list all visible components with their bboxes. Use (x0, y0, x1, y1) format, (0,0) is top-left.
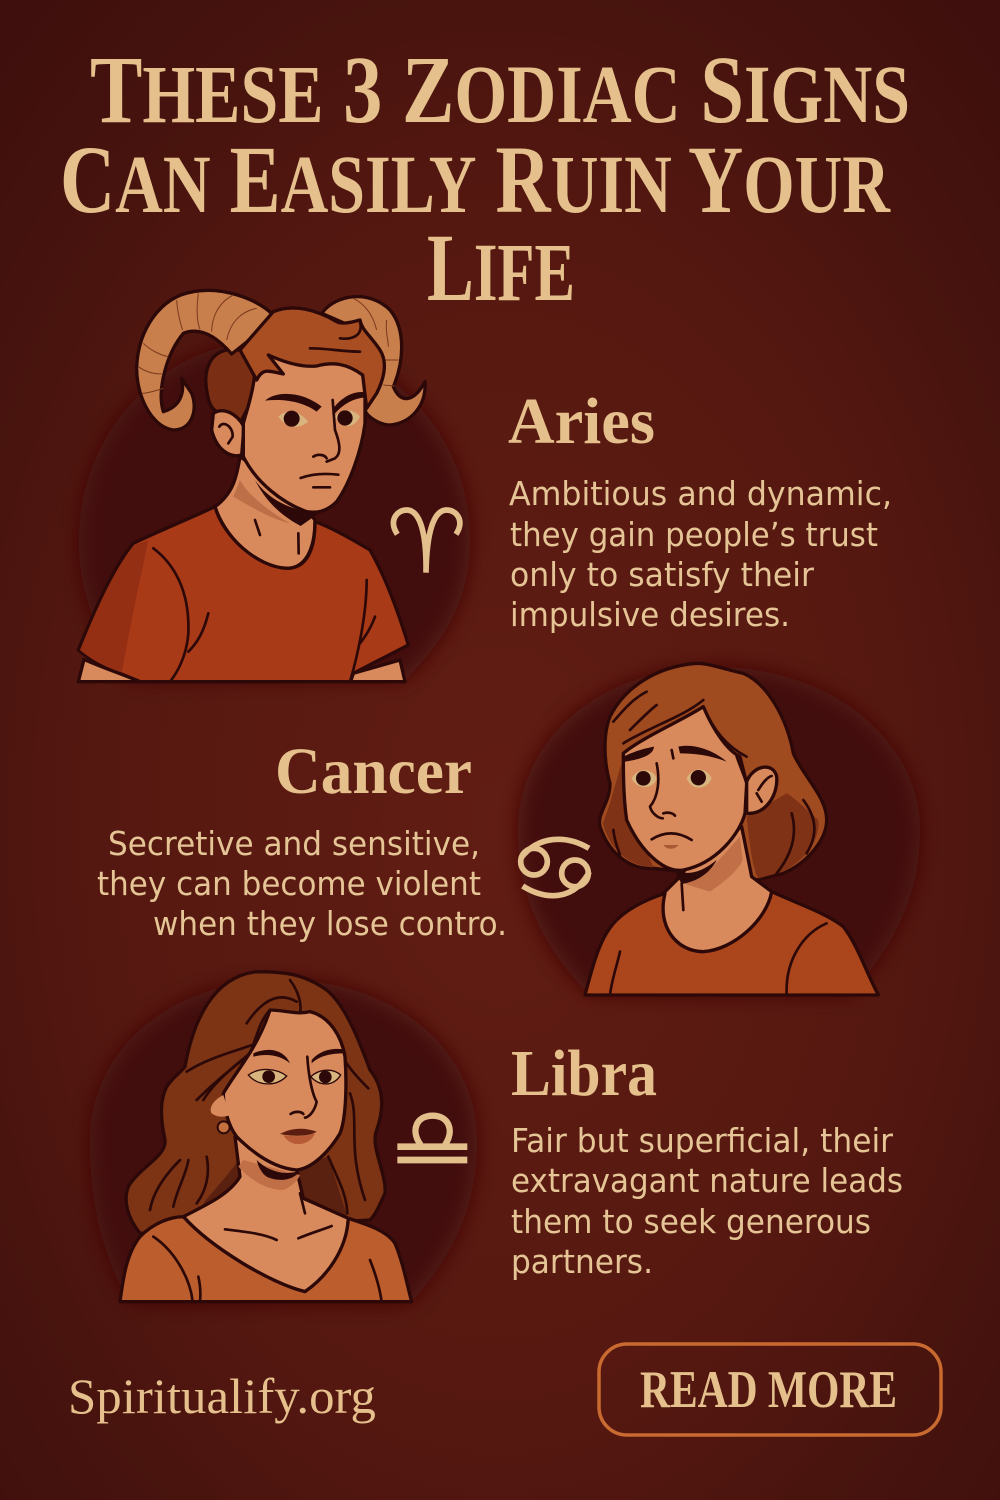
text: cancer description: Secretive and sensitive, (108, 824, 480, 863)
arm left (78, 659, 140, 682)
text: libra description: Fair but superficial, their (511, 1121, 893, 1160)
text: cancer description (97, 824, 507, 943)
text: libra description (511, 1121, 903, 1281)
hair side (206, 350, 257, 423)
text: cancer description: they can become violent (97, 864, 481, 903)
text: aries description: Ambitious and dynamic, (509, 474, 892, 513)
facial features (265, 392, 367, 487)
facial features (248, 1049, 343, 1144)
shirt (78, 507, 408, 682)
neck (183, 1137, 348, 1292)
panel: cancer (97, 663, 920, 995)
face (623, 707, 747, 870)
title: THESE 3 ZODIAC SIGNS (90, 36, 910, 143)
cancer halo (518, 667, 920, 995)
text: aries description: only to satisfy their (510, 555, 814, 594)
text: aries description (509, 474, 892, 634)
heading: aries: Aries (508, 385, 655, 458)
illustration: libra woman (120, 972, 412, 1302)
illustration: cancer woman (585, 663, 878, 995)
hair top (240, 308, 384, 408)
arm right (351, 660, 405, 682)
shirt (585, 892, 878, 995)
hair (599, 663, 827, 880)
ear and earring (211, 1095, 230, 1133)
title (60, 36, 910, 321)
panel: aries (78, 290, 892, 682)
ear (212, 411, 244, 456)
hair (126, 972, 385, 1233)
top (120, 1217, 412, 1302)
heading: libra: Libra (511, 1037, 657, 1110)
panel: libra (90, 972, 903, 1303)
text: libra description: them to seek generous (511, 1202, 871, 1241)
libra halo (90, 980, 477, 1303)
aries halo (79, 340, 470, 680)
icon: libra symbol (397, 1116, 467, 1160)
icon: cancer symbol (521, 839, 589, 896)
hair strands (613, 692, 747, 783)
neck (215, 457, 315, 568)
text: libra description: partners. (511, 1242, 653, 1281)
face (223, 1010, 346, 1170)
text: libra description: extravagant nature leads (511, 1161, 903, 1200)
ear (747, 767, 777, 813)
neck (662, 827, 772, 952)
title: CAN EASILY RUIN YOUR (60, 126, 891, 233)
button: read more (599, 1344, 941, 1435)
icon: aries symbol (393, 510, 460, 573)
heading: cancer: Cancer (275, 735, 472, 808)
title: LIFE (427, 214, 575, 321)
face (243, 353, 365, 512)
text: aries description: impulsive desires. (510, 595, 790, 634)
illustration: aries man with ram horns (78, 290, 425, 682)
facial features (623, 746, 727, 849)
left horn (137, 290, 277, 430)
footer website: Spiritualify.org (68, 1368, 376, 1424)
right horn (322, 297, 425, 425)
text: cancer description: when they lose contro. (153, 904, 507, 943)
text: aries description: they gain people’s trust (510, 515, 878, 554)
button: read more: READ MORE (640, 1361, 897, 1419)
